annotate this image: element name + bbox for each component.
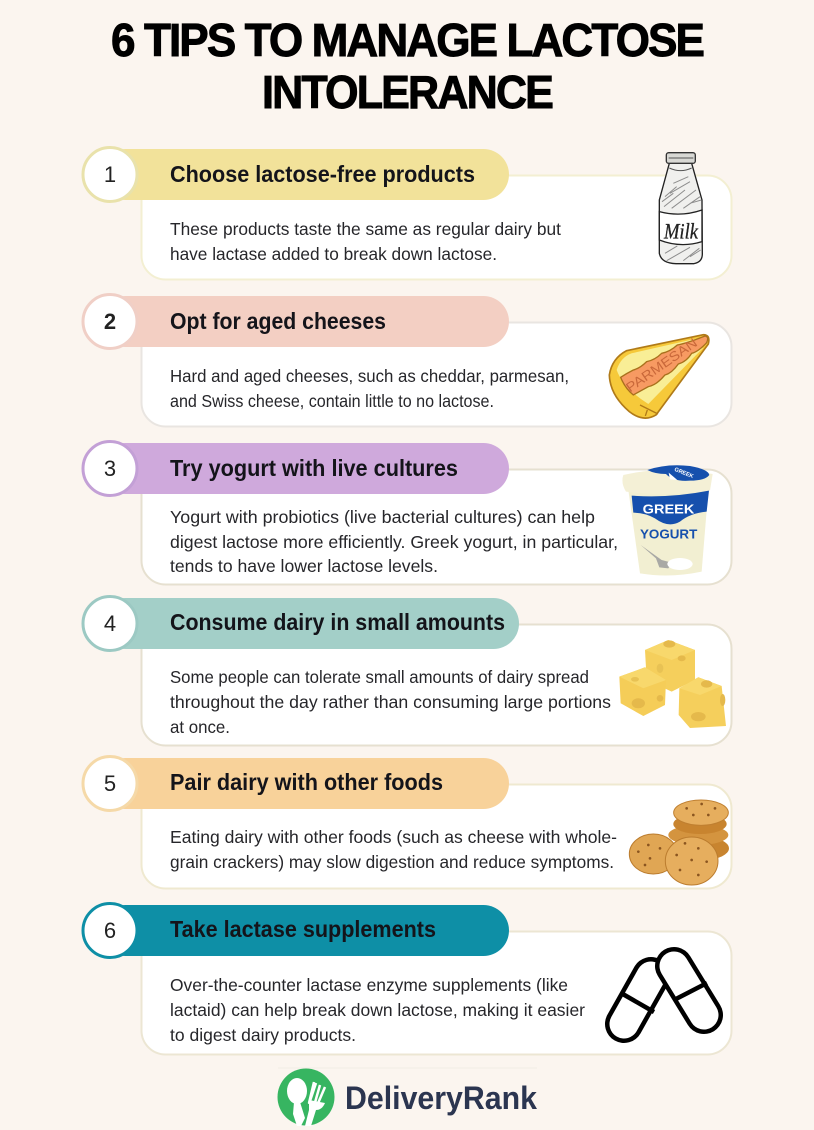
panel: tip 5 bbox=[83, 756, 732, 888]
text: tip 4: throughout the day rather than consuming large portions bbox=[170, 692, 611, 712]
card: tip 4 body bbox=[142, 624, 732, 746]
text: tip 1: These products taste the same as regular dairy but bbox=[170, 219, 561, 239]
heading pill: tip 1 bbox=[100, 149, 509, 200]
heading pill: tip 5 bbox=[100, 758, 509, 809]
text: tip 2: and Swiss cheese, contain little to no lactose. bbox=[170, 391, 494, 411]
text: tip 3 bbox=[170, 507, 618, 576]
number badge: 5: 5 bbox=[104, 771, 116, 796]
icon: greek yogurt cup: GREEK bbox=[643, 501, 695, 516]
text: tip 5: Eating dairy with other foods (such as cheese with whole- bbox=[170, 827, 617, 847]
number badge: 1 bbox=[83, 148, 137, 202]
icon: cheese cubes bbox=[619, 640, 726, 728]
icon: greek yogurt cup bbox=[622, 465, 713, 575]
heading pill: tip 3 bbox=[100, 443, 509, 494]
number badge: 6: 6 bbox=[104, 918, 116, 943]
number badge: 1: 1 bbox=[104, 162, 116, 187]
number badge: 4 bbox=[83, 596, 137, 650]
icon: greek yogurt cup: GREEK bbox=[673, 467, 695, 480]
panel: tip 1 bbox=[83, 148, 732, 280]
panel: tip 4 bbox=[83, 596, 732, 746]
text: tip 4 bbox=[170, 667, 611, 737]
number badge: 6 bbox=[83, 904, 137, 958]
title bbox=[111, 14, 703, 118]
number badge: 2 bbox=[83, 294, 137, 348]
heading: tip 2: Opt for aged cheeses bbox=[170, 308, 386, 334]
text: tip 4: Some people can tolerate small amounts of dairy spread bbox=[170, 667, 589, 687]
title: INTOLERANCE bbox=[262, 66, 552, 118]
icon: capsules bbox=[621, 966, 707, 1024]
heading pill: tip 2 bbox=[100, 296, 509, 347]
text: tip 6: lactaid) can help break down lactose, making it easier bbox=[170, 1000, 585, 1020]
number badge: 3 bbox=[83, 442, 137, 496]
icon: parmesan wedge: PARMESAN bbox=[623, 335, 700, 395]
number badge: 3: 3 bbox=[104, 456, 116, 481]
icon: crackers bbox=[629, 800, 729, 885]
heading: tip 4: Consume dairy in small amounts bbox=[170, 609, 505, 635]
panel: tip 2 bbox=[83, 294, 732, 426]
logo: DeliveryRank bbox=[278, 1068, 537, 1126]
card: tip 6 body bbox=[142, 932, 732, 1054]
number badge: 4: 4 bbox=[104, 611, 116, 636]
text: tip 6: to digest dairy products. bbox=[170, 1025, 356, 1045]
text: tip 3: Yogurt with probiotics (live bacterial cultures) can help bbox=[170, 507, 595, 527]
icon: parmesan wedge bbox=[609, 335, 709, 418]
text: tip 5: grain crackers) may slow digestion and reduce symptoms. bbox=[170, 852, 614, 872]
number badge: 5 bbox=[83, 756, 137, 810]
icon: milk bottle bbox=[659, 153, 702, 264]
card: tip 1 body bbox=[142, 176, 732, 280]
heading: tip 3: Try yogurt with live cultures bbox=[170, 455, 458, 481]
heading pill: tip 6 bbox=[100, 905, 509, 956]
heading: tip 6: Take lactase supplements bbox=[170, 916, 436, 942]
card: tip 2 body bbox=[142, 322, 732, 426]
text: tip 5 bbox=[170, 827, 617, 872]
number badge: 2: 2 bbox=[104, 309, 116, 334]
text: tip 1 bbox=[170, 219, 561, 264]
text: tip 3: digest lactose more efficiently. Greek yogurt, in particular, bbox=[170, 532, 618, 552]
text: tip 6 bbox=[170, 975, 585, 1045]
text: tip 1: have lactase added to break down lactose. bbox=[170, 244, 497, 264]
panel: tip 6 bbox=[83, 904, 732, 1054]
panel: tip 3 bbox=[83, 442, 732, 584]
text: tip 2 bbox=[170, 366, 569, 411]
icon: milk bottle: Milk bbox=[663, 219, 699, 244]
heading: tip 5: Pair dairy with other foods bbox=[170, 769, 443, 795]
heading: tip 1: Choose lactose-free products bbox=[170, 161, 475, 187]
title: 6 TIPS TO MANAGE LACTOSE bbox=[111, 14, 703, 66]
text: tip 6: Over-the-counter lactase enzyme supplements (like bbox=[170, 975, 568, 995]
icon: greek yogurt cup: YOGURT bbox=[640, 528, 698, 542]
wordmark: DeliveryRank bbox=[345, 1080, 537, 1116]
heading pill: tip 4 bbox=[100, 598, 519, 649]
text: tip 2: Hard and aged cheeses, such as cheddar, parmesan, bbox=[170, 366, 569, 386]
card: tip 3 body bbox=[142, 470, 732, 584]
text: tip 4: at once. bbox=[170, 717, 230, 737]
card: tip 5 body bbox=[142, 784, 732, 888]
text: tip 3: tends to have lower lactose levels. bbox=[170, 556, 438, 576]
icon: green circle with spoon and fork bbox=[278, 1068, 334, 1126]
